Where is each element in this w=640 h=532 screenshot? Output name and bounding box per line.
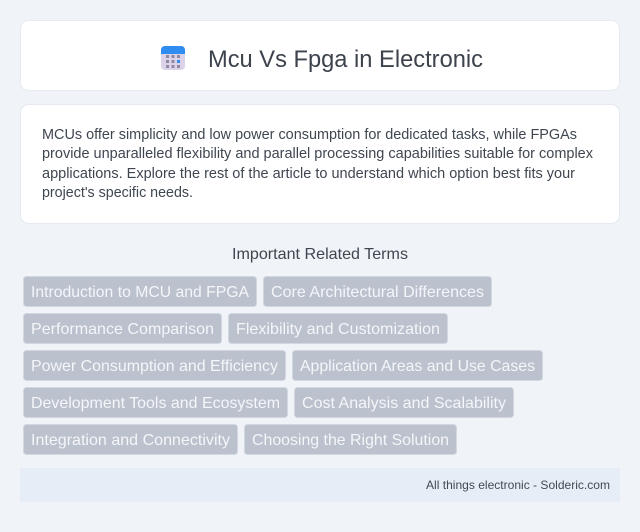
tag: architecture: Core Architectural Differences bbox=[271, 284, 484, 301]
tag: performance bbox=[24, 314, 222, 344]
tag: introduction: Introduction to MCU and FPGA bbox=[31, 284, 249, 301]
tag: flexibility bbox=[228, 314, 448, 344]
tag: performance: Performance Comparison bbox=[31, 321, 214, 338]
tag: applications bbox=[292, 350, 542, 380]
title: Mcu Vs Fpga in Electronic bbox=[208, 46, 483, 73]
description text bbox=[42, 127, 594, 201]
tag: integration bbox=[24, 424, 238, 454]
footer text: All things electronic - Solderic.com bbox=[426, 478, 610, 492]
tag list bbox=[24, 276, 542, 454]
tag: power bbox=[24, 350, 286, 380]
tag: tools bbox=[24, 388, 288, 418]
tag: introduction bbox=[24, 276, 256, 306]
tag: power: Power Consumption and Efficiency bbox=[31, 358, 278, 375]
icon: calendar bbox=[161, 46, 185, 70]
tag: flexibility: Flexibility and Customization bbox=[236, 321, 440, 338]
description text: applications. Explore the rest of the article to understand which option best fits your bbox=[42, 166, 575, 182]
description text: project's specific needs. bbox=[42, 185, 193, 201]
tag: choosing: Choosing the Right Solution bbox=[252, 432, 449, 449]
tag: architecture bbox=[264, 276, 492, 306]
tag: integration: Integration and Connectivity bbox=[31, 432, 230, 449]
description text: MCUs offer simplicity and low power consumption for dedicated tasks, while FPGAs bbox=[42, 127, 577, 143]
section heading: Important Related Terms bbox=[232, 246, 408, 263]
tag: cost: Cost Analysis and Scalability bbox=[302, 395, 506, 412]
description text: provide unparalleled flexibility and parallel processing capabilities suitable for complex bbox=[42, 146, 594, 162]
tag: tools: Development Tools and Ecosystem bbox=[31, 395, 280, 412]
tag: choosing bbox=[244, 424, 456, 454]
description panel bbox=[20, 104, 620, 224]
tag: applications: Application Areas and Use Cases bbox=[300, 358, 535, 375]
footer bbox=[20, 468, 620, 502]
header panel bbox=[20, 20, 620, 90]
tag: cost bbox=[294, 388, 514, 418]
